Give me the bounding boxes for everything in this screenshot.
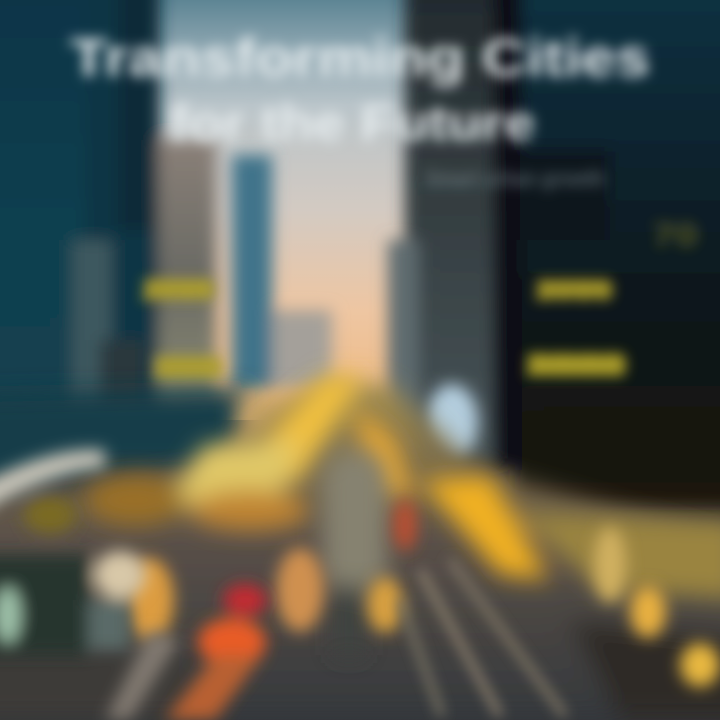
title: Transforming Cities (70, 28, 650, 88)
road (0, 385, 720, 720)
cars and traffic (0, 450, 267, 720)
title (70, 28, 650, 151)
title: for the Future (170, 95, 535, 151)
yellow labels: 2060 (524, 347, 628, 383)
person silhouette (322, 450, 388, 655)
background sky (100, 0, 460, 420)
left lower dark band (0, 388, 250, 495)
background base (0, 420, 720, 720)
yellow labels: 2030 (140, 274, 216, 307)
yellow labels: 2040 (152, 352, 224, 385)
left buildings (0, 0, 332, 460)
bokeh lights (126, 499, 720, 687)
subtitle: Smart urban growth (425, 166, 605, 191)
road lights (85, 375, 720, 600)
road lane lines (400, 560, 565, 716)
yellow labels (140, 217, 698, 385)
right buildings (388, 0, 720, 510)
yellow labels: 2050 (534, 274, 614, 307)
blue sign on tower (426, 384, 478, 460)
yellow labels: 70 (652, 217, 698, 253)
horizon glow (240, 395, 390, 465)
